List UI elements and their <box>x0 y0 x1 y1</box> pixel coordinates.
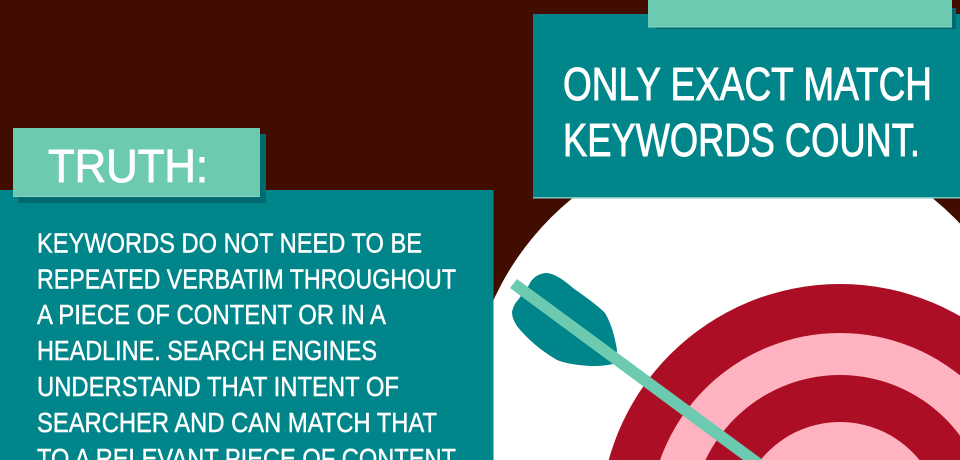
arrow shaft <box>510 279 763 460</box>
truth text <box>37 228 456 460</box>
truth text: SEARCHER AND CAN MATCH THAT <box>37 407 437 438</box>
panel: myth statement <box>533 0 960 198</box>
panel background <box>533 14 960 198</box>
truth label: TRUTH: <box>48 140 208 192</box>
truth text: UNDERSTAND THAT INTENT OF <box>37 371 399 402</box>
truth text: HEADLINE. SEARCH ENGINES <box>37 335 377 366</box>
truth text: A PIECE OF CONTENT OR IN A <box>37 299 386 330</box>
truth text: REPEATED VERBATIM THROUGHOUT <box>37 264 456 294</box>
truth label <box>13 128 266 203</box>
target illustration <box>468 134 960 460</box>
target rings <box>600 284 960 460</box>
myth text <box>563 58 932 166</box>
panel: truth explanation <box>0 128 494 460</box>
panel background <box>0 190 494 460</box>
arrow fletching <box>512 273 617 366</box>
truth text: KEYWORDS DO NOT NEED TO BE <box>37 228 422 258</box>
icon: arrow <box>510 273 763 460</box>
target backdrop: white circle <box>468 134 960 460</box>
myth label <box>648 0 956 29</box>
